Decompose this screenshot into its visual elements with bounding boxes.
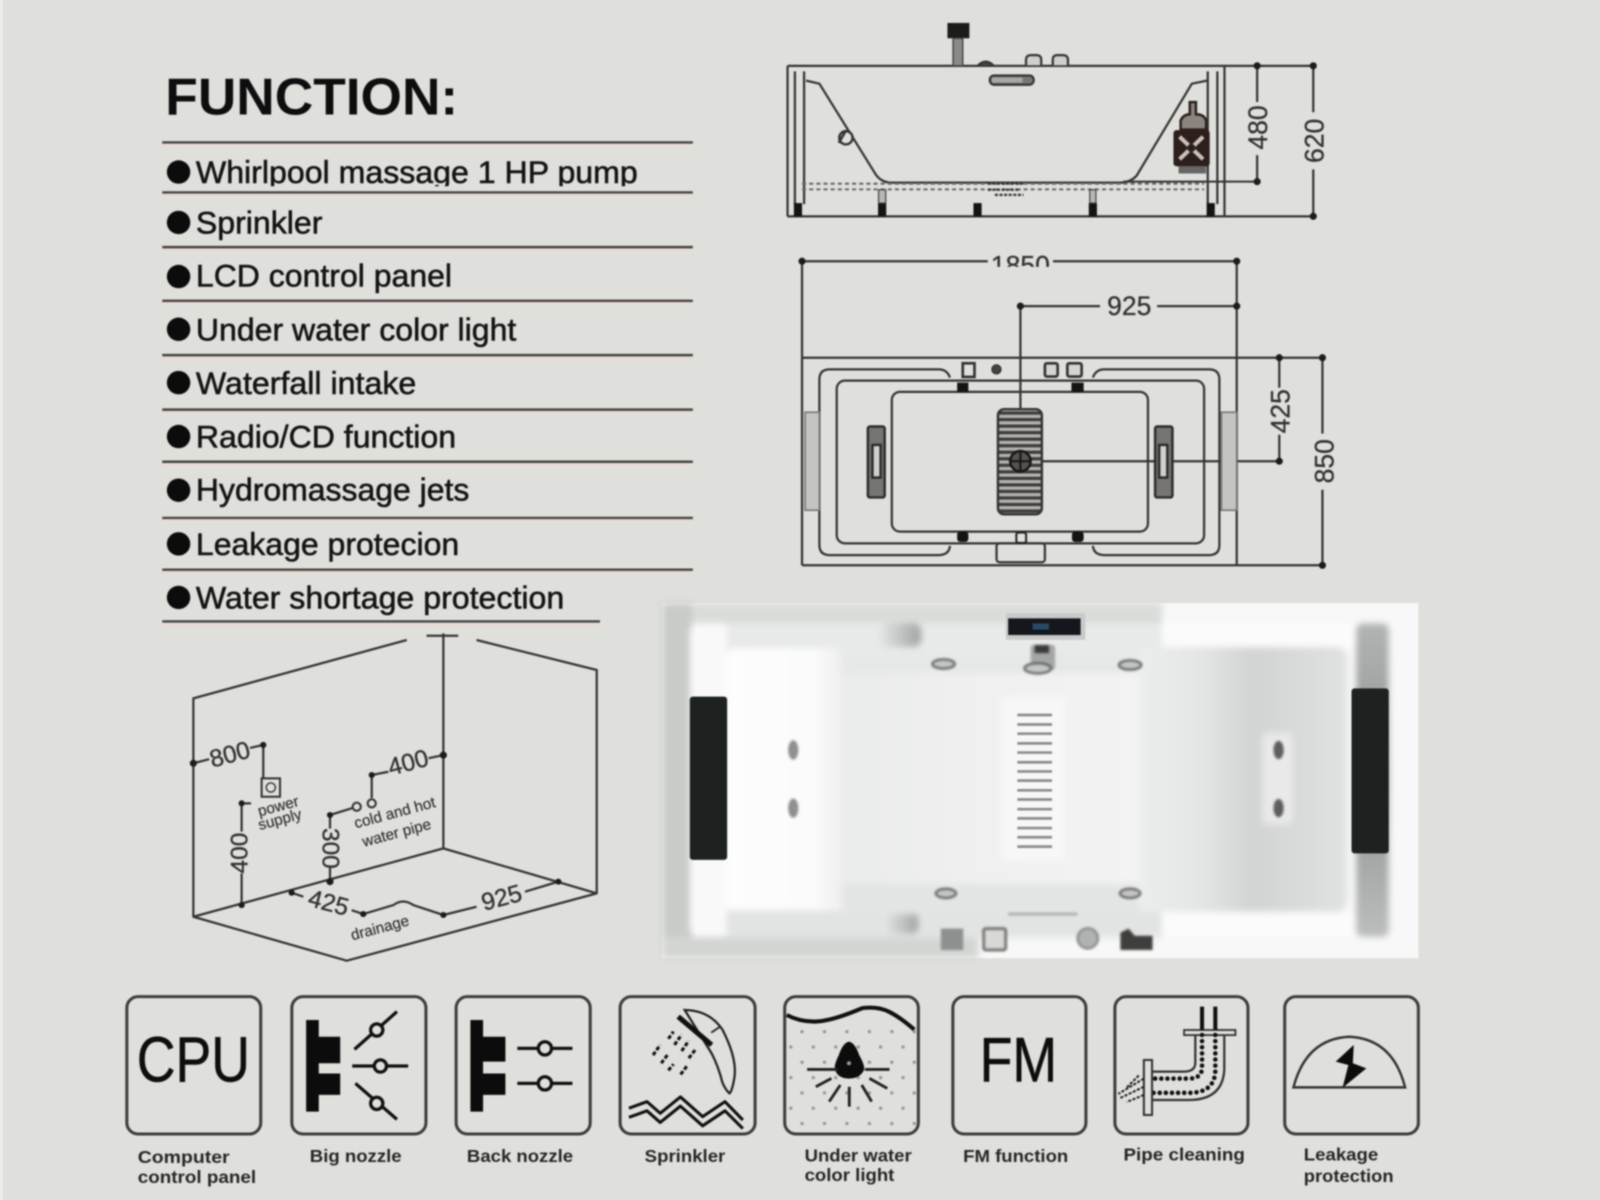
icon label: computer control panel xyxy=(138,1147,256,1187)
icon: sprinkler xyxy=(620,997,755,1134)
left wall dimensions: supply xyxy=(256,806,304,834)
icon: back nozzle xyxy=(456,997,590,1134)
title: FUNCTION: xyxy=(165,68,458,126)
icon label: leakage protection xyxy=(1304,1145,1394,1186)
controls xyxy=(963,363,1082,377)
floor dimensions: drainage xyxy=(349,912,411,944)
installation room diagram xyxy=(190,633,597,961)
item: sprinkler: Sprinkler xyxy=(196,205,322,241)
item: jets: Hydromassage jets xyxy=(196,472,469,508)
dimension labels: 925 xyxy=(1107,291,1151,321)
dimension labels: 850 xyxy=(1309,439,1339,483)
left wall dimensions xyxy=(190,737,304,908)
floor dimensions xyxy=(289,879,561,944)
icon label: computer control panel: control panel xyxy=(138,1167,256,1187)
item: water shortage: Water shortage protection xyxy=(196,580,564,616)
icon label: leakage protection: protection xyxy=(1304,1166,1394,1186)
dimension labels: 1850 xyxy=(991,250,1050,280)
icon: leakage protection xyxy=(1285,997,1418,1134)
drain slats xyxy=(1017,715,1052,847)
knobs xyxy=(978,55,1068,85)
water pipe dimensions: cold and hot xyxy=(352,794,438,832)
left wall dimensions: power xyxy=(256,793,301,820)
headrest pads xyxy=(690,688,1389,860)
jets and fittings xyxy=(788,645,1284,950)
feature list xyxy=(162,142,694,624)
icon label: computer control panel: Computer xyxy=(138,1147,230,1167)
jet xyxy=(839,131,853,144)
dimension labels: 425 xyxy=(1266,389,1296,433)
bathtub photo xyxy=(662,603,1418,958)
icon label: leakage protection: Leakage xyxy=(1304,1145,1379,1165)
item: lcd: LCD control panel xyxy=(196,258,452,294)
icon: CPU computer control panel: CPU xyxy=(137,1024,250,1096)
plan view drawing xyxy=(798,250,1339,569)
drain xyxy=(998,409,1042,514)
nubs xyxy=(957,383,1084,543)
icon: pipe cleaning xyxy=(1115,997,1248,1134)
icon: FM function xyxy=(953,997,1086,1134)
icon label: FM function: FM function xyxy=(963,1146,1068,1166)
item: light: Under water color light xyxy=(196,311,517,347)
icon label: pipe cleaning: Pipe cleaning xyxy=(1123,1145,1245,1165)
icon label: big nozzle: Big nozzle xyxy=(310,1146,402,1166)
faucet xyxy=(947,23,969,66)
water pipe dimensions xyxy=(316,745,447,885)
floor dimensions: 925 xyxy=(479,880,525,917)
deck outlines xyxy=(819,369,1219,562)
side handles xyxy=(868,427,1172,497)
item: radio: Radio/CD function xyxy=(196,419,456,455)
icon: big nozzle xyxy=(292,997,426,1134)
icon label: under water color light xyxy=(805,1146,912,1185)
left wall dimensions: 800 xyxy=(207,737,253,773)
dimension labels xyxy=(980,250,1339,483)
floor dimensions: 425 xyxy=(305,885,352,922)
left wall dimensions: 400 xyxy=(226,833,253,873)
side bars xyxy=(805,412,1237,510)
icon: under water color light xyxy=(785,997,918,1134)
icon: CPU computer control panel xyxy=(127,997,261,1134)
icon label: under water color light: color light xyxy=(805,1165,895,1185)
dimensions xyxy=(1243,62,1329,220)
icon label: sprinkler: Sprinkler xyxy=(645,1146,726,1166)
control display xyxy=(1006,613,1085,640)
item: leakage: Leakage protecion xyxy=(196,526,459,562)
icon label: under water color light: Under water xyxy=(805,1146,912,1166)
water pipe dimensions: 400 xyxy=(385,745,432,782)
item: whirlpool: Whirlpool massage 1 HP pump xyxy=(196,154,638,190)
item: waterfall: Waterfall intake xyxy=(196,365,416,401)
icon label: back nozzle: Back nozzle xyxy=(467,1146,573,1166)
icon: FM function: FM xyxy=(980,1026,1057,1096)
water pipe dimensions: water pipe xyxy=(359,816,433,851)
dimensions: 620 xyxy=(1299,119,1329,163)
feet xyxy=(794,190,1215,216)
side elevation drawing xyxy=(788,23,1329,220)
dimensions: 480 xyxy=(1243,105,1273,150)
pump xyxy=(1173,102,1210,173)
water pipe dimensions: 300 xyxy=(316,828,343,869)
